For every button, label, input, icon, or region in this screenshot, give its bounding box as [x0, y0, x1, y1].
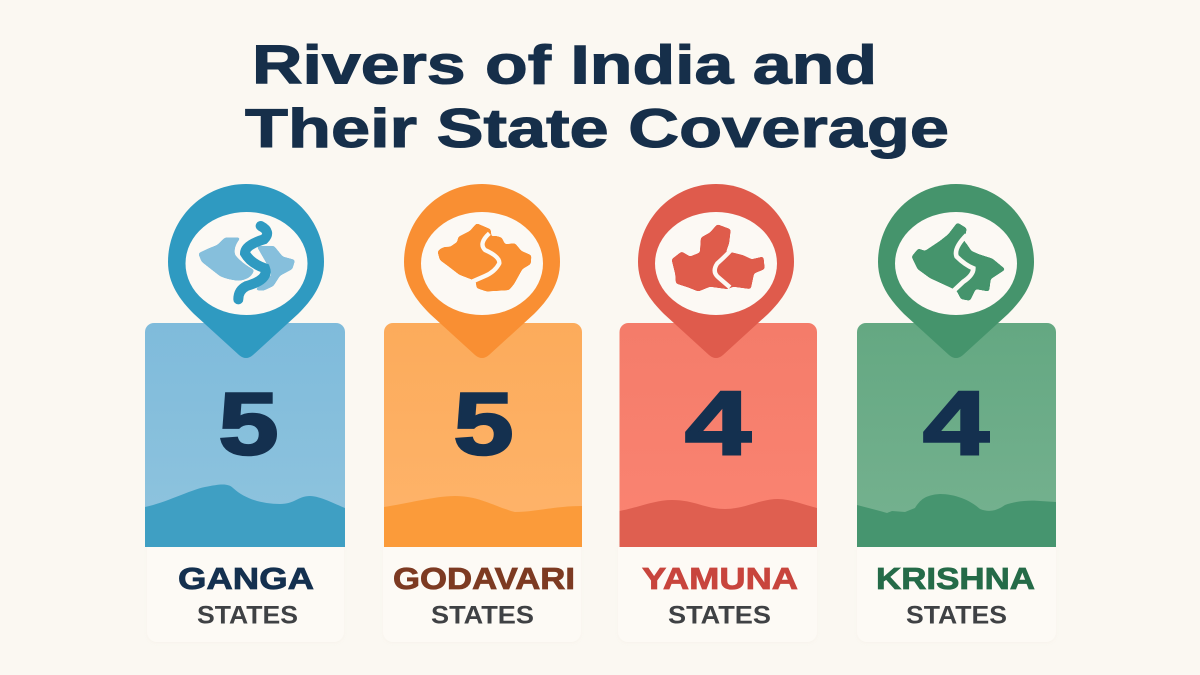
wave: Krishna [857, 494, 1056, 547]
panel: Godavari [383, 184, 582, 642]
wave: Godavari [384, 496, 582, 547]
title: Their State Coverage [245, 97, 949, 159]
wave: Ganga [145, 484, 345, 547]
icon: Godavari map [438, 223, 531, 291]
label card: Godavari: GODAVARI [393, 561, 575, 596]
number: Godavari: 5 [454, 374, 514, 473]
label card: Godavari [383, 540, 581, 642]
number: Yamuna: 4 [685, 374, 751, 474]
label card: Krishna: STATES [906, 602, 1007, 630]
label card: Ganga [147, 540, 344, 642]
pin: Ganga [168, 184, 324, 358]
pin: Yamuna [638, 184, 794, 358]
pin: Godavari [404, 184, 560, 358]
title [245, 34, 949, 159]
label card: Krishna: KRISHNA [876, 561, 1035, 596]
wave: Yamuna [620, 499, 817, 547]
label card: Godavari: STATES [431, 602, 534, 630]
label card: Ganga: STATES [197, 602, 298, 630]
panel: Krishna [857, 184, 1056, 642]
title: Rivers of India and [252, 34, 877, 96]
colour card: Ganga [145, 323, 345, 547]
panel: Yamuna [618, 184, 817, 642]
label card: Ganga: GANGA [178, 561, 314, 596]
label card: Yamuna: STATES [668, 602, 771, 630]
number: Krishna: 4 [923, 374, 989, 474]
label card: Krishna [857, 540, 1056, 642]
icon: Ganga map [198, 226, 295, 299]
label card: Yamuna [618, 540, 817, 642]
icon: Yamuna map [672, 224, 765, 291]
icon: Krishna map [912, 223, 1005, 301]
label card: Yamuna: YAMUNA [642, 561, 798, 596]
colour card: Yamuna [620, 323, 817, 547]
pin: Krishna [878, 184, 1034, 358]
colour card: Godavari [384, 323, 582, 547]
panel: Ganga [145, 184, 345, 642]
number: Ganga: 5 [218, 374, 278, 473]
colour card: Krishna [857, 323, 1056, 547]
